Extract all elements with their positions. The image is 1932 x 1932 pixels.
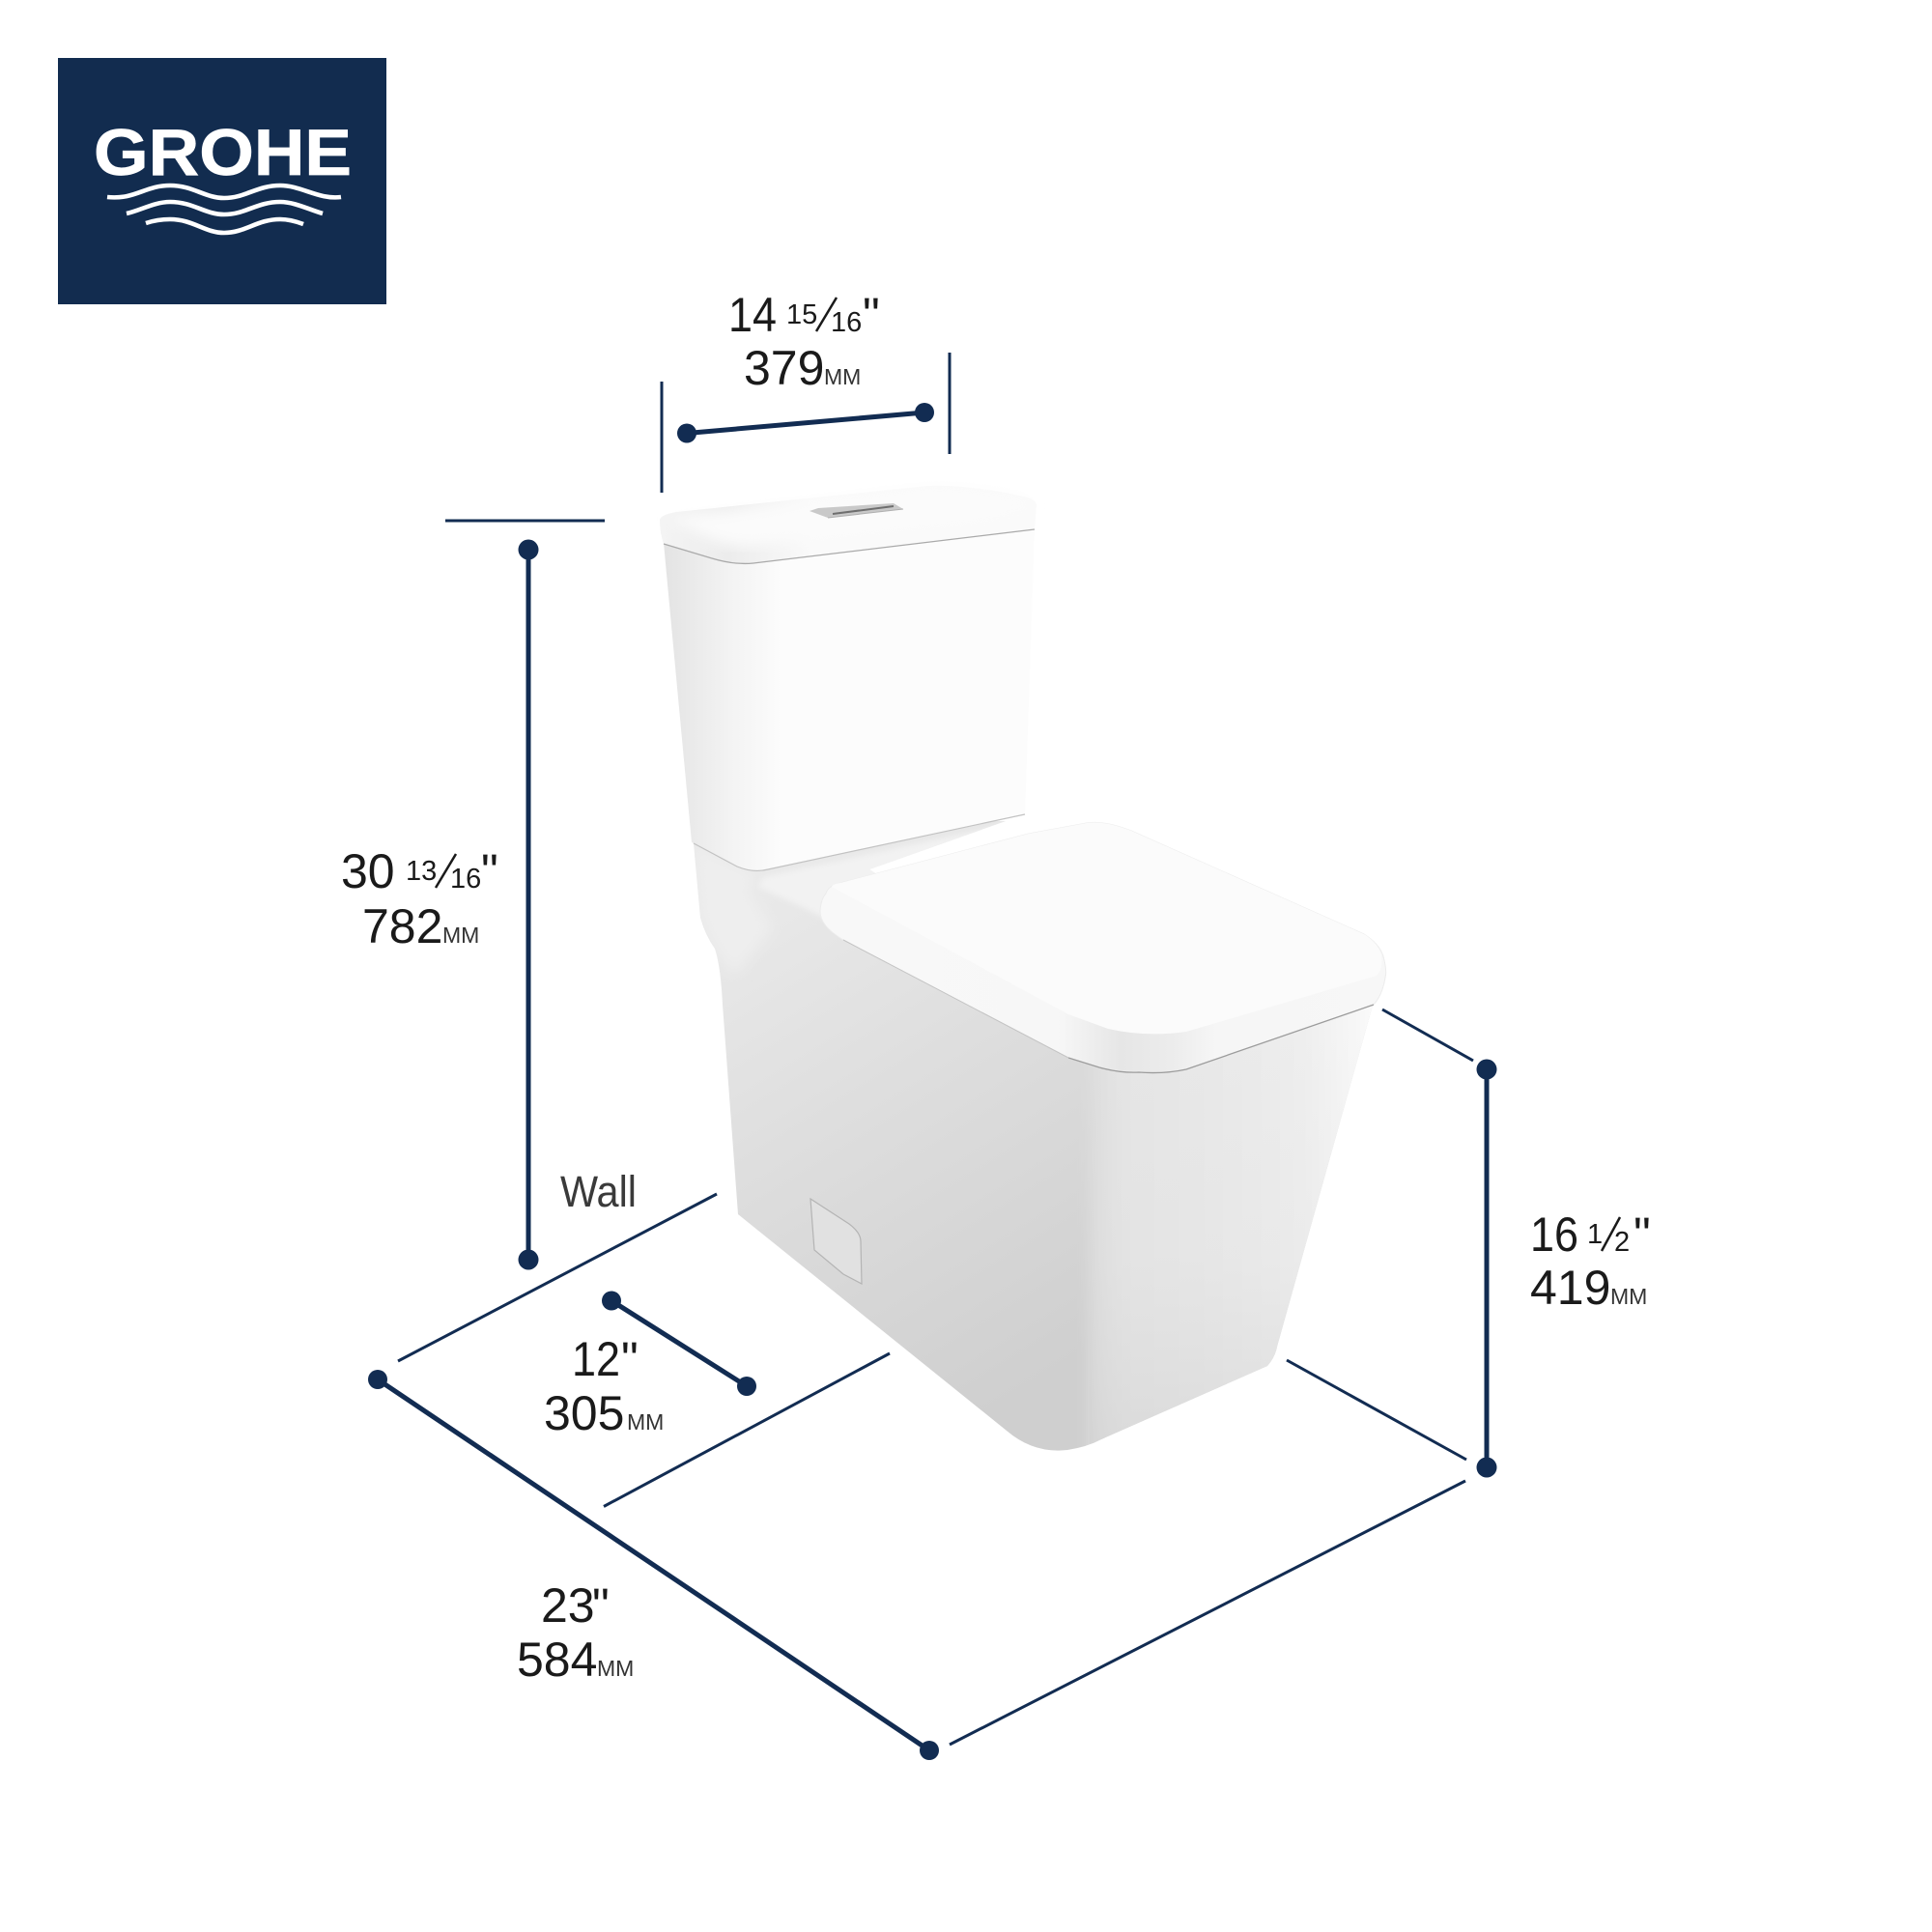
toilet bowl body <box>676 820 1391 1468</box>
dimension: depth 23 in <box>368 1370 939 1760</box>
width extension ticks <box>662 353 950 493</box>
height label: 30 <box>341 844 395 898</box>
height label: 13 <box>406 856 437 887</box>
tank lid <box>660 486 1037 563</box>
dimension: tank width 14 15/16 in <box>662 288 950 493</box>
front floor reference line <box>950 1481 1465 1745</box>
logo: GROHE badge <box>58 58 386 304</box>
height label: MM <box>442 923 479 948</box>
depth label: 23 <box>541 1578 595 1633</box>
drain centre reference line <box>604 1353 890 1507</box>
rough-in label: 12 <box>572 1332 620 1386</box>
seat height dimension line <box>1476 1059 1497 1478</box>
height top tick <box>445 520 605 522</box>
depth label: " <box>592 1578 610 1633</box>
height label: 782 <box>362 899 442 953</box>
seat height label: 1 <box>1587 1219 1603 1250</box>
toilet illustration <box>660 486 1391 1468</box>
width label: MM <box>824 364 861 389</box>
dimension: overall height 30 13/16 in <box>341 521 605 1269</box>
depth dimension line <box>368 1370 939 1760</box>
flush button <box>810 503 903 518</box>
depth label <box>517 1578 634 1687</box>
seat height label: 2 <box>1614 1227 1630 1258</box>
width label: 14 <box>728 288 777 342</box>
logo wordmark: GROHE <box>94 116 352 189</box>
seat height label: 16 <box>1530 1208 1578 1262</box>
height label: 16 <box>450 864 481 895</box>
tank lid seam <box>664 529 1035 563</box>
seat lid top <box>832 822 1381 1034</box>
seat height label: " <box>1634 1208 1651 1262</box>
tank body <box>664 529 1035 870</box>
seat height label: 419 <box>1530 1261 1610 1315</box>
wall reference line <box>398 1194 717 1361</box>
seat lid edge <box>820 822 1386 1072</box>
width dimension line <box>677 403 934 442</box>
depth label: MM <box>597 1656 634 1681</box>
access panel <box>810 1199 862 1284</box>
logo waves <box>107 185 341 233</box>
width label: 15 <box>786 299 817 330</box>
seat left shadow line <box>843 940 1068 1058</box>
rough-in dimension line <box>602 1291 756 1396</box>
height dimension line <box>518 539 539 1269</box>
rough-in label: MM <box>627 1409 664 1435</box>
rough-in label: 305 <box>544 1386 624 1440</box>
dimension: rough-in 12 in <box>544 1291 756 1440</box>
tank lid top highlight <box>667 488 1034 546</box>
tank base seam <box>694 814 1025 870</box>
dimension: seat height 16 1/2 in <box>1287 1009 1651 1478</box>
depth label: 584 <box>517 1633 597 1687</box>
height label: " <box>481 844 498 898</box>
rough-in label: " <box>621 1332 639 1386</box>
seat height label <box>1530 1208 1651 1315</box>
width label: 379 <box>744 341 824 395</box>
width label: 16 <box>831 307 862 338</box>
width label: " <box>863 288 880 342</box>
label: Wall: Wall <box>560 1167 637 1216</box>
rough-in label <box>544 1332 664 1440</box>
height label <box>341 844 498 953</box>
seat gap shadow <box>1068 1005 1374 1073</box>
seat height extension ticks <box>1287 1009 1473 1460</box>
width label <box>728 288 880 395</box>
seat height label: MM <box>1610 1284 1647 1309</box>
